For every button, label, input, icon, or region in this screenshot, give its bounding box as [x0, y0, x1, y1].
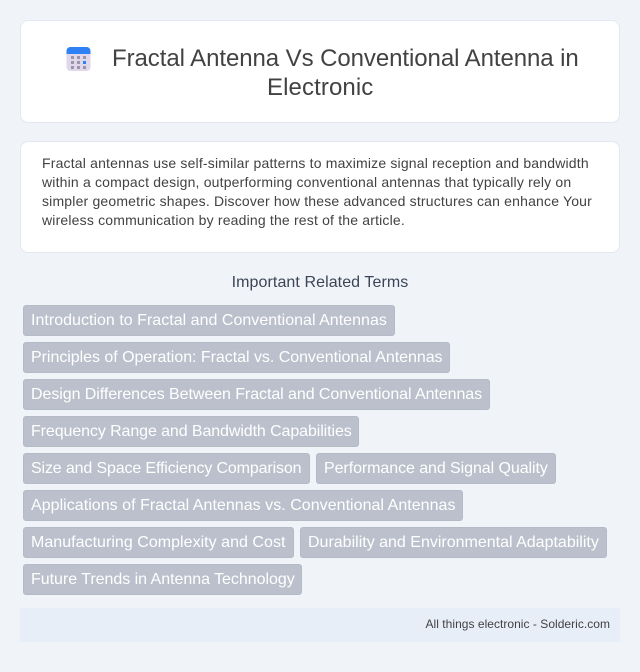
- panel: title card: [20, 20, 620, 123]
- intro paragraph: simpler geometric shapes. Discover how these advanced structures can enhance Your: [42, 193, 592, 209]
- tag: [23, 342, 450, 373]
- tag: [23, 379, 490, 410]
- icon: calendar: [66, 47, 90, 71]
- tag: Applications of Fractal Antennas vs. Conventional Antennas: [31, 497, 456, 514]
- tag: Design Differences Between Fractal and Conventional Antennas: [31, 386, 482, 403]
- tag: [23, 527, 294, 558]
- tag: [23, 305, 395, 336]
- tag: Manufacturing Complexity and Cost: [31, 534, 285, 551]
- heading: related terms: Important Related Terms: [232, 274, 408, 291]
- tag: Introduction to Fractal and Conventional Antennas: [31, 312, 387, 329]
- intro paragraph: within a compact design, outperforming conventional antennas that typically rely on: [42, 174, 571, 190]
- tag: Future Trends in Antenna Technology: [31, 571, 295, 588]
- tag: Size and Space Efficiency Comparison: [31, 460, 301, 477]
- tag: Performance and Signal Quality: [324, 460, 548, 477]
- footer: All things electronic - Solderic.com: [426, 617, 610, 631]
- tag: [300, 527, 607, 558]
- tag: [23, 453, 310, 484]
- intro paragraph: wireless communication by reading the rest of the article.: [42, 212, 405, 228]
- tag: [316, 453, 556, 484]
- tag: Frequency Range and Bandwidth Capabilities: [31, 423, 352, 440]
- tag: [23, 416, 359, 447]
- tag list: [23, 305, 607, 595]
- tag: Principles of Operation: Fractal vs. Conventional Antennas: [31, 349, 443, 366]
- title: [112, 45, 579, 101]
- title: Electronic: [267, 74, 373, 101]
- intro paragraph: [42, 155, 592, 228]
- tag: Durability and Environmental Adaptability: [308, 534, 599, 551]
- intro paragraph: Fractal antennas use self-similar patterns to maximize signal reception and bandwidth: [42, 155, 589, 171]
- footer: [20, 608, 620, 642]
- title: Fractal Antenna Vs Conventional Antenna in: [112, 45, 579, 72]
- tag: [23, 490, 463, 521]
- panel: intro text card: [20, 141, 620, 253]
- tag: [23, 564, 302, 595]
